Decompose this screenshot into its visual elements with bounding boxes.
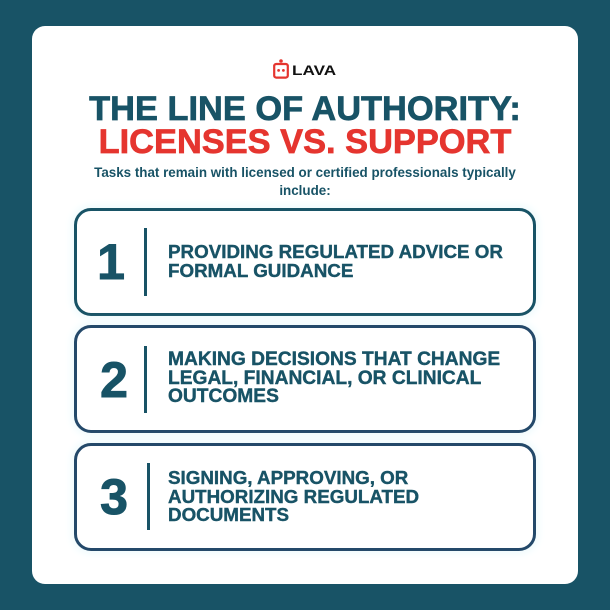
item 1 text bbox=[168, 241, 503, 280]
item 1 text: PROVIDING REGULATED ADVICE OR bbox=[168, 241, 503, 262]
item 2 text bbox=[168, 349, 500, 407]
item 3 text: SIGNING, APPROVING, OR bbox=[168, 467, 408, 488]
item 1 text: FORMAL GUIDANCE bbox=[168, 260, 353, 280]
subtitle: Tasks that remain with licensed or certified professionals typically bbox=[94, 165, 516, 180]
item 1 divider bbox=[144, 228, 147, 296]
item 3 number: 3 bbox=[100, 469, 128, 525]
item 3 text: AUTHORIZING REGULATED bbox=[168, 486, 419, 506]
panel: item 3 bbox=[72, 441, 538, 554]
item 3 box bbox=[74, 443, 536, 551]
logo: LAVA bbox=[273, 59, 336, 79]
icon: robot head bbox=[273, 59, 289, 79]
subtitle: include: bbox=[279, 183, 331, 198]
item 1 number: 1 bbox=[97, 234, 125, 290]
item 2 number: 2 bbox=[100, 352, 128, 408]
title line 2: LICENSES VS. SUPPORT bbox=[99, 123, 511, 161]
panel: item 2 bbox=[72, 316, 538, 436]
item 2 text: MAKING DECISIONS THAT CHANGE bbox=[168, 349, 500, 370]
title line 1: THE LINE OF AUTHORITY: bbox=[89, 90, 521, 128]
logo wordmark: LAVA bbox=[292, 63, 336, 78]
item 2 text: OUTCOMES bbox=[168, 386, 279, 407]
item 3 divider bbox=[147, 463, 150, 530]
item 2 text: LEGAL, FINANCIAL, OR CLINICAL bbox=[168, 368, 481, 388]
item 2 divider bbox=[144, 346, 147, 413]
panel: item 1 bbox=[72, 206, 538, 318]
item 2 box bbox=[74, 325, 536, 433]
subtitle bbox=[94, 165, 516, 198]
item 3 text: DOCUMENTS bbox=[168, 504, 289, 525]
item 3 text bbox=[168, 467, 419, 525]
item 1 box bbox=[74, 208, 536, 316]
